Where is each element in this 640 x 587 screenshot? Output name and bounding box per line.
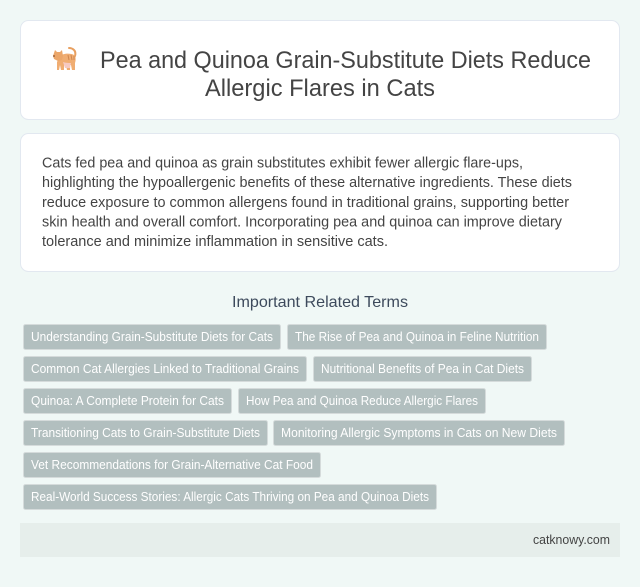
title text <box>100 47 591 102</box>
tag: How Pea and Quinoa Reduce Allergic Flares <box>246 393 478 408</box>
tag: Monitoring Allergic Symptoms in Cats on New Diets <box>281 425 557 440</box>
tag <box>24 484 436 510</box>
footer: catknowy.com <box>533 532 610 547</box>
summary text: tolerance and minimize inflammation in sensitive cats. <box>42 234 388 250</box>
tag: Transitioning Cats to Grain-Substitute Diets <box>31 425 260 440</box>
tag <box>24 388 232 414</box>
footer <box>20 523 620 557</box>
tag <box>288 324 546 350</box>
tag <box>24 420 268 446</box>
title text: Allergic Flares in Cats <box>205 75 435 102</box>
icon: cat <box>53 48 76 70</box>
tag <box>238 388 486 414</box>
tag: Common Cat Allergies Linked to Traditional Grains <box>31 361 299 376</box>
related terms heading: Important Related Terms <box>232 294 408 311</box>
title text: Pea and Quinoa Grain-Substitute Diets Reduce <box>100 47 591 74</box>
tag <box>314 356 532 382</box>
tag <box>24 356 306 382</box>
summary text: Cats fed pea and quinoa as grain substitutes exhibit fewer allergic flare-ups, <box>42 156 523 172</box>
tag: Understanding Grain-Substitute Diets for Cats <box>31 329 273 344</box>
summary text: highlighting the hypoallergenic benefits of these alternative ingredients. These diets <box>42 175 572 191</box>
tag <box>24 452 320 478</box>
summary text <box>42 156 572 250</box>
tag: Vet Recommendations for Grain-Alternative Cat Food <box>31 457 313 472</box>
tag: Quinoa: A Complete Protein for Cats <box>31 393 224 408</box>
tag: Nutritional Benefits of Pea in Cat Diets <box>321 361 524 376</box>
tag: The Rise of Pea and Quinoa in Feline Nutrition <box>295 329 539 344</box>
title card <box>20 20 620 120</box>
summary card <box>20 134 620 272</box>
related terms tags <box>24 324 564 510</box>
tag <box>24 324 280 350</box>
tag <box>274 420 564 446</box>
summary text: skin health and overall comfort. Incorporating pea and quinoa can improve dietary <box>42 214 563 230</box>
summary text: reduce exposure to common allergens found in traditional grains, supporting better <box>42 195 569 211</box>
tag: Real-World Success Stories: Allergic Cats Thriving on Pea and Quinoa Diets <box>31 489 429 504</box>
